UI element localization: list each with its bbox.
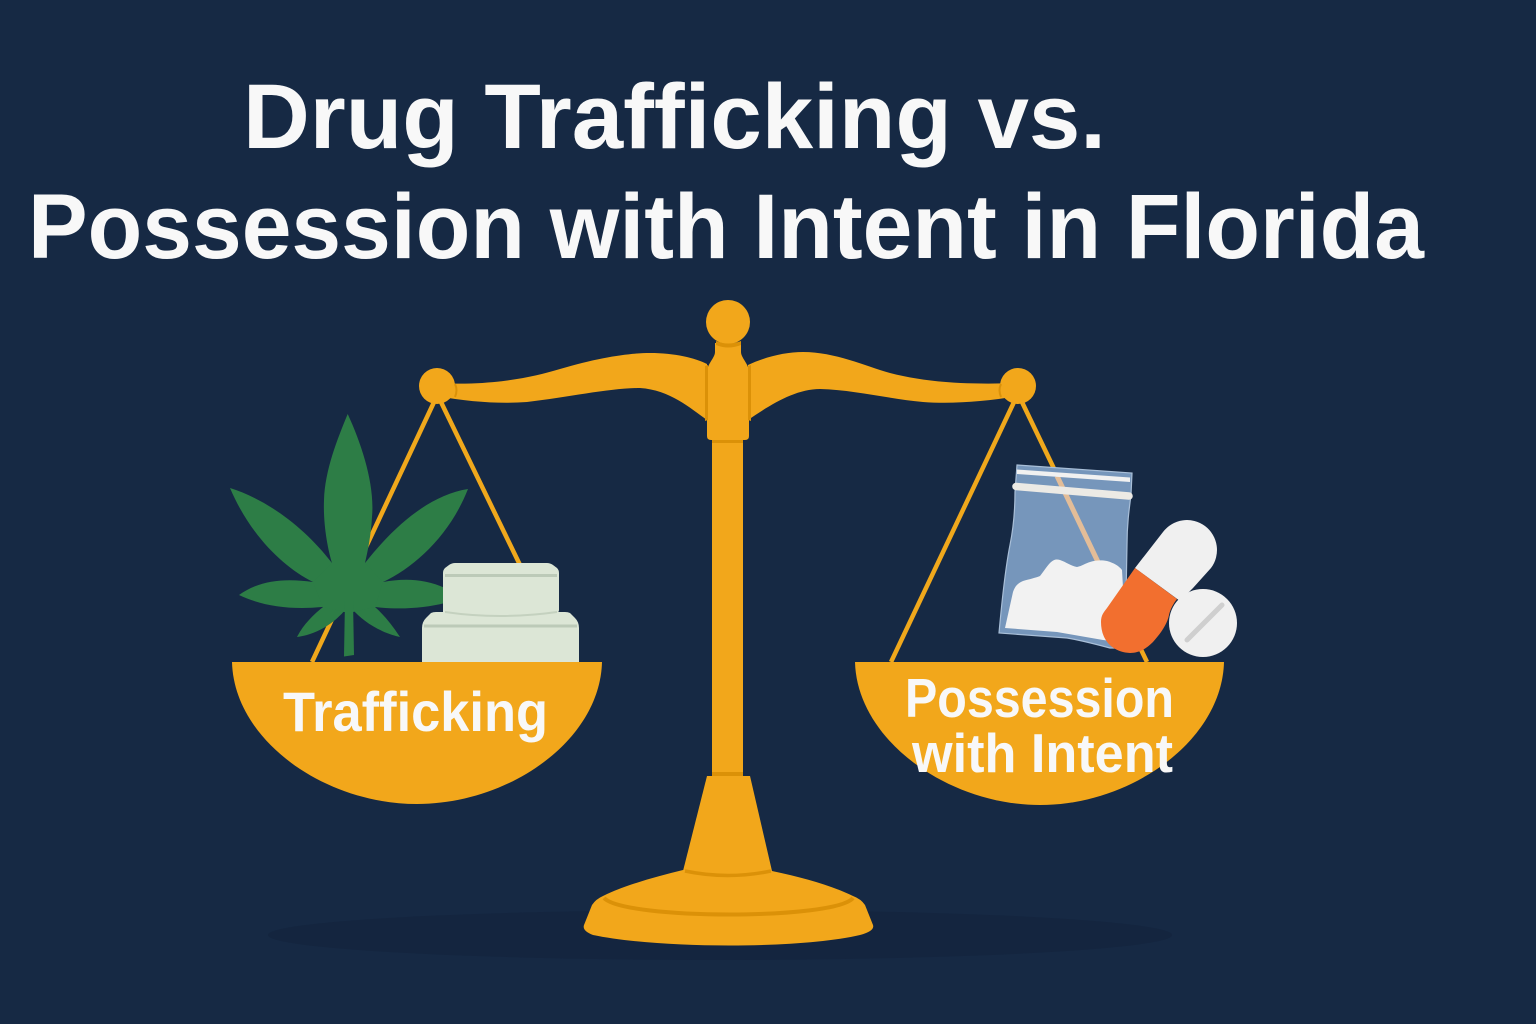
base neck [683,776,772,871]
lower block band [424,624,577,628]
upper block band [445,574,557,577]
finial shading [716,341,741,348]
base foot [584,870,873,946]
ground shadow [268,910,1172,960]
plastic bag of powder [999,465,1132,648]
neck joint shading [712,772,743,776]
title: Drug Trafficking vs. [243,66,1106,168]
label: Trafficking: Trafficking [283,680,548,743]
collar side shading [705,365,751,421]
powder [1005,559,1123,642]
capsule pill [1101,520,1237,657]
balance scale [312,300,1147,946]
pole collar shadow [712,440,743,443]
lower left leaflet [297,600,345,637]
beam left arm [437,353,707,420]
chain seen through bag [1057,476,1098,562]
right pan label: with Intent [911,722,1173,784]
stacked packages [422,563,579,662]
left pan bowl [232,662,602,804]
title: Possession with Intent in Florida [28,176,1425,278]
leaf stem [344,600,354,656]
beam end right [1000,368,1036,404]
left pan label [232,662,602,804]
right pan label [855,662,1224,805]
leaf centre [313,563,383,612]
upper block [443,563,559,618]
title [28,66,1425,278]
lower block [422,612,579,662]
beam right arm [748,352,1018,420]
tablet score line [1187,605,1222,640]
label: Possession with Intent: Possession [905,667,1174,729]
left side leaflet [239,580,350,608]
tablet [1169,589,1237,657]
upper left leaflet [230,488,350,590]
zip seal [1017,470,1130,482]
base shading [604,871,853,914]
capsule orange half [1101,568,1177,653]
centre collar [707,343,749,440]
left pan chains [312,400,520,662]
top finial [706,300,750,344]
right side leaflet [350,580,445,608]
right pan bowl [855,662,1224,805]
right pan chains [891,400,1147,662]
upper right leaflet [350,489,468,590]
lower right leaflet [352,600,400,637]
central pole [712,436,743,778]
top leaflet [324,414,372,590]
ball shading [455,384,1001,397]
cannabis leaf [230,414,468,656]
bag body [999,465,1132,648]
beam end left [419,368,455,404]
capsule white half [1135,520,1217,601]
upper block lower edge [445,611,557,617]
